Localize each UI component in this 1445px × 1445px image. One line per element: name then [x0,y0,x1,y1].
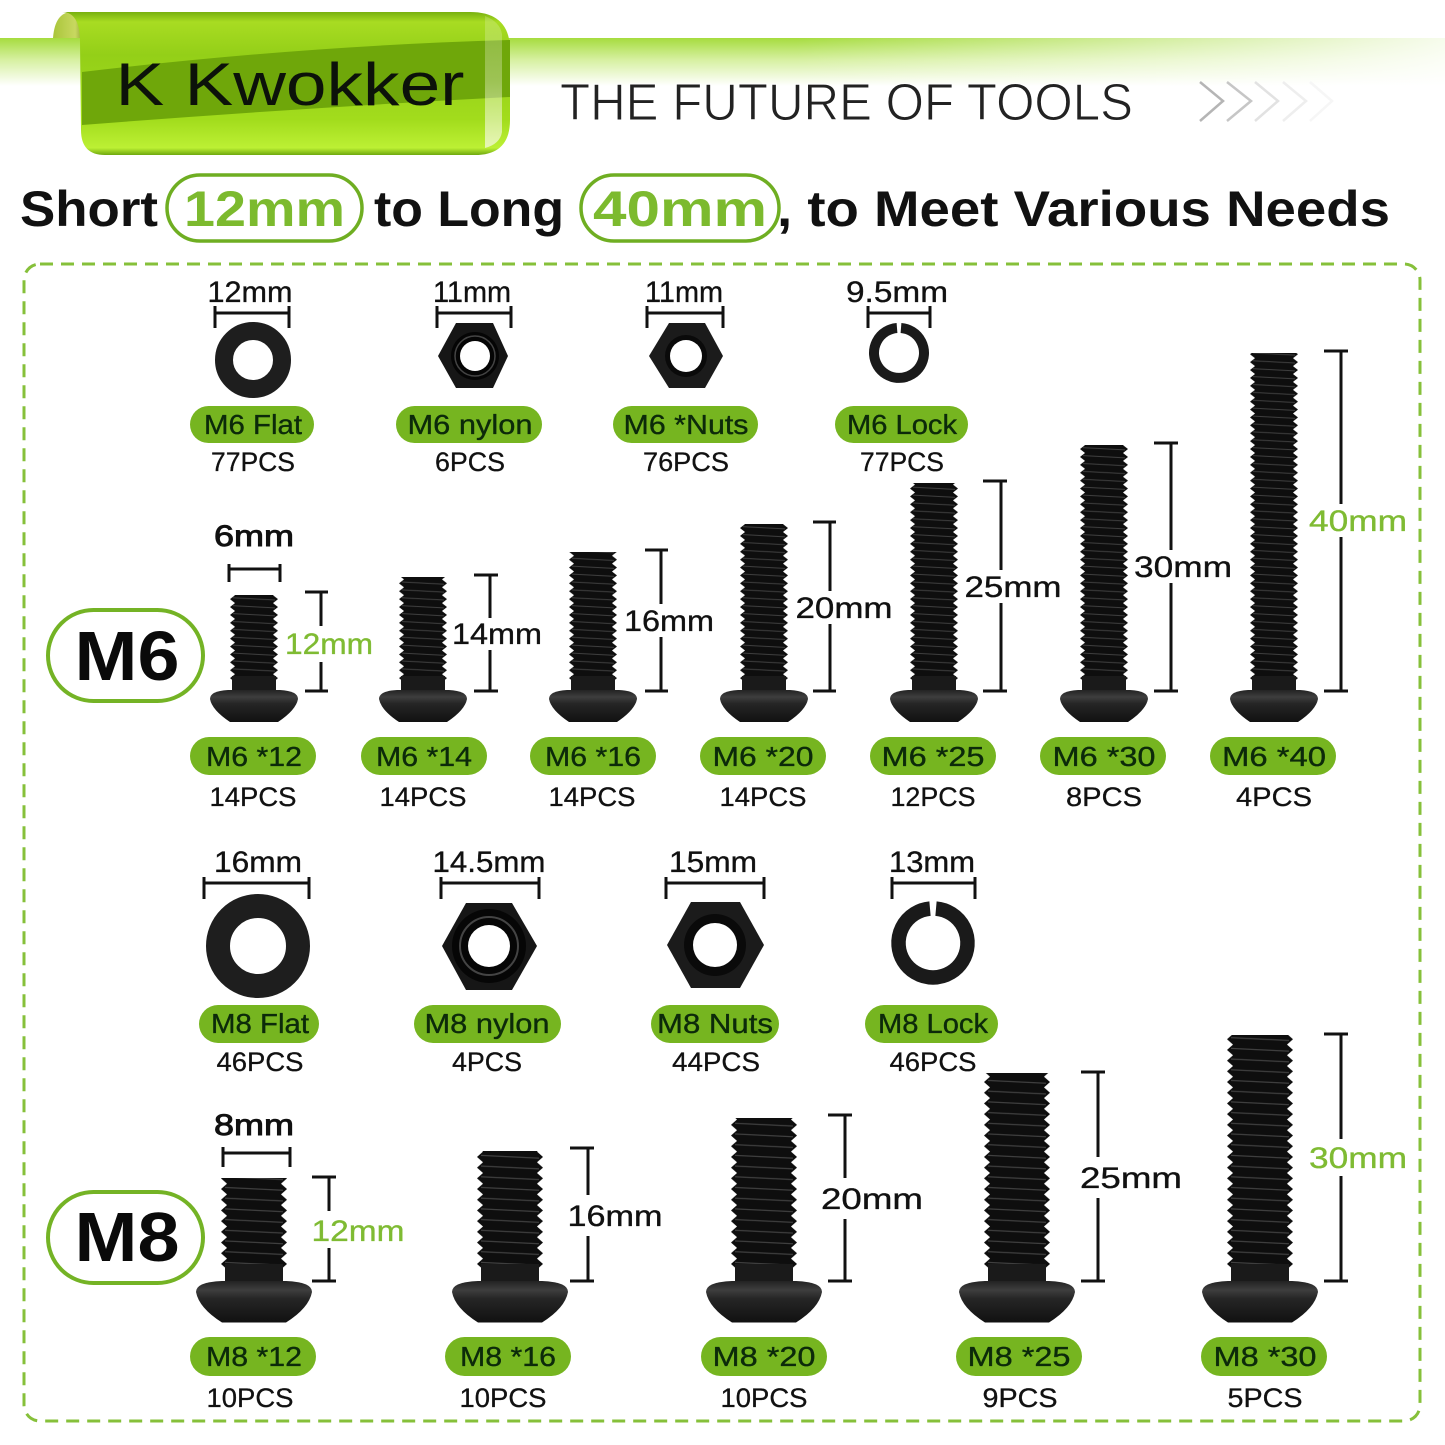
panel: M6 washers and nuts [190,276,968,477]
M8 x 20 bolt [701,1115,923,1413]
M6 x 14 bolt [361,575,542,812]
brand ribbon banner [53,12,510,155]
M6 x 12 bolt: 12mm [285,628,373,661]
M8 lock washer: 13mm [889,846,975,879]
headline: Short [20,181,158,237]
M6 hex nut: 11mm [645,276,723,309]
panel: M8 bolts [190,1034,1407,1413]
M8 nylon nut: 4PCS [452,1047,522,1077]
M6 x 30 bolt: M6 *30 [1052,741,1156,772]
M6 lock washer: M6 Lock [847,409,958,440]
headline: 40mm [593,181,767,237]
M6 size badge [48,610,203,701]
M6 x 25 bolt [870,481,1062,812]
headline: to Long [374,181,564,237]
M8 x 12 bolt: 12mm [312,1215,404,1248]
M6 x 25 bolt: 12PCS [890,782,976,812]
panel: M6 bolts [190,351,1407,812]
M6 hex nut: 76PCS [643,447,729,477]
M6 x 40 bolt: M6 *40 [1222,741,1326,772]
M8 x 12 bolt: M8 *12 [206,1341,302,1372]
headline: 12mm [184,181,345,237]
M8 size badge: M8 [74,1198,180,1276]
M8 x 16 bolt: M8 *16 [460,1341,556,1372]
M8 flat washer [199,846,319,1077]
M8 x 30 bolt: 5PCS [1228,1383,1302,1413]
tagline: THE FUTURE OF TOOLS [560,74,1133,132]
dashed panel outline [24,264,1420,1421]
M6 lock washer [835,276,968,477]
M8 nylon nut: 14.5mm [432,846,546,879]
M8 nylon nut [414,846,561,1077]
M6 x 20 bolt [700,522,892,812]
M6 x 20 bolt: 14PCS [720,782,806,812]
M6 x 12 bolt: 14PCS [210,782,296,812]
M8 x 30 bolt [1201,1034,1407,1413]
M8 nylon nut: M8 nylon [424,1008,550,1039]
M6 size badge: M6 [74,617,180,695]
M8 x 20 bolt: M8 *20 [712,1341,816,1372]
M6 hex nut [613,276,758,477]
M8 size badge [48,1192,203,1283]
M6 hex nut: M6 *Nuts [624,409,748,440]
M6 x 30 bolt: 8PCS [1066,782,1142,812]
M8 x 20 bolt: 10PCS [720,1383,808,1413]
M6 nylon nut [396,276,542,477]
M8 x 16 bolt [445,1148,662,1413]
header green band [0,38,1445,86]
M6 x 40 bolt [1210,351,1407,812]
M6 x 14 bolt: M6 *14 [376,741,472,772]
M6 nylon nut: M6 nylon [408,409,532,440]
M8 x 25 bolt [956,1072,1182,1413]
M8 flat washer: 46PCS [216,1047,304,1077]
M8 x 16 bolt: 10PCS [460,1383,546,1413]
M8 hex nut: M8 Nuts [657,1008,773,1039]
M8 x 25 bolt: 25mm [1080,1162,1182,1195]
M6 lock washer: 9.5mm [846,276,948,309]
M6 x 20 bolt: M6 *20 [712,741,814,772]
M6 x 16 bolt: M6 *16 [545,741,641,772]
M6 flat washer [190,276,314,477]
M8 x 30 bolt: M8 *30 [1214,1341,1316,1372]
M6 x 16 bolt: 16mm [624,605,714,638]
icon: fading chevron arrows [1200,82,1332,121]
M6 x 12 bolt [190,520,373,812]
M8 x 20 bolt: 20mm [821,1183,923,1216]
M8 x 25 bolt: 9PCS [982,1383,1058,1413]
M8 x 30 bolt: 30mm [1309,1142,1407,1175]
M6 flat washer: 12mm [208,276,292,309]
brand name: K Kwokker [116,51,464,118]
M8 x 12 bolt [190,1109,404,1413]
M8 x 12 bolt: 10PCS [206,1383,294,1413]
M8 lock washer: M8 Lock [878,1008,989,1039]
M6 nylon nut: 11mm [433,276,511,309]
M8 hex nut: 44PCS [672,1047,760,1077]
M8 hex nut: 15mm [669,846,757,879]
headline: , to Meet Various Needs [777,181,1390,237]
M6 x 40 bolt: 40mm [1309,505,1407,538]
M8 hex nut [651,846,779,1077]
M6 x 14 bolt: 14mm [452,618,542,651]
panel: M8 washers and nuts [199,846,998,1077]
M6 x 30 bolt [1040,443,1232,812]
M6 x 30 bolt: 30mm [1134,551,1232,584]
headline [20,175,1390,241]
M8 x 12 bolt: 8mm [214,1109,294,1142]
M8 flat washer: M8 Flat [211,1008,309,1039]
M6 flat washer: 77PCS [211,447,295,477]
M6 x 40 bolt: 4PCS [1236,782,1312,812]
M8 x 16 bolt: 16mm [568,1200,662,1233]
M6 x 25 bolt: M6 *25 [882,741,984,772]
M6 nylon nut: 6PCS [435,447,505,477]
M8 lock washer: 46PCS [890,1047,976,1077]
M6 x 20 bolt: 20mm [796,592,892,625]
M6 x 16 bolt: 14PCS [548,782,636,812]
M6 x 14 bolt: 14PCS [380,782,466,812]
M6 flat washer: M6 Flat [204,409,302,440]
M6 x 16 bolt [530,550,714,812]
M6 x 12 bolt: M6 *12 [206,741,302,772]
M6 lock washer: 77PCS [860,447,944,477]
M6 x 25 bolt: 25mm [964,571,1062,604]
M8 lock washer [865,846,998,1077]
M8 flat washer: 16mm [214,846,302,879]
M8 x 25 bolt: M8 *25 [968,1341,1070,1372]
M6 x 12 bolt: 6mm [214,520,294,553]
